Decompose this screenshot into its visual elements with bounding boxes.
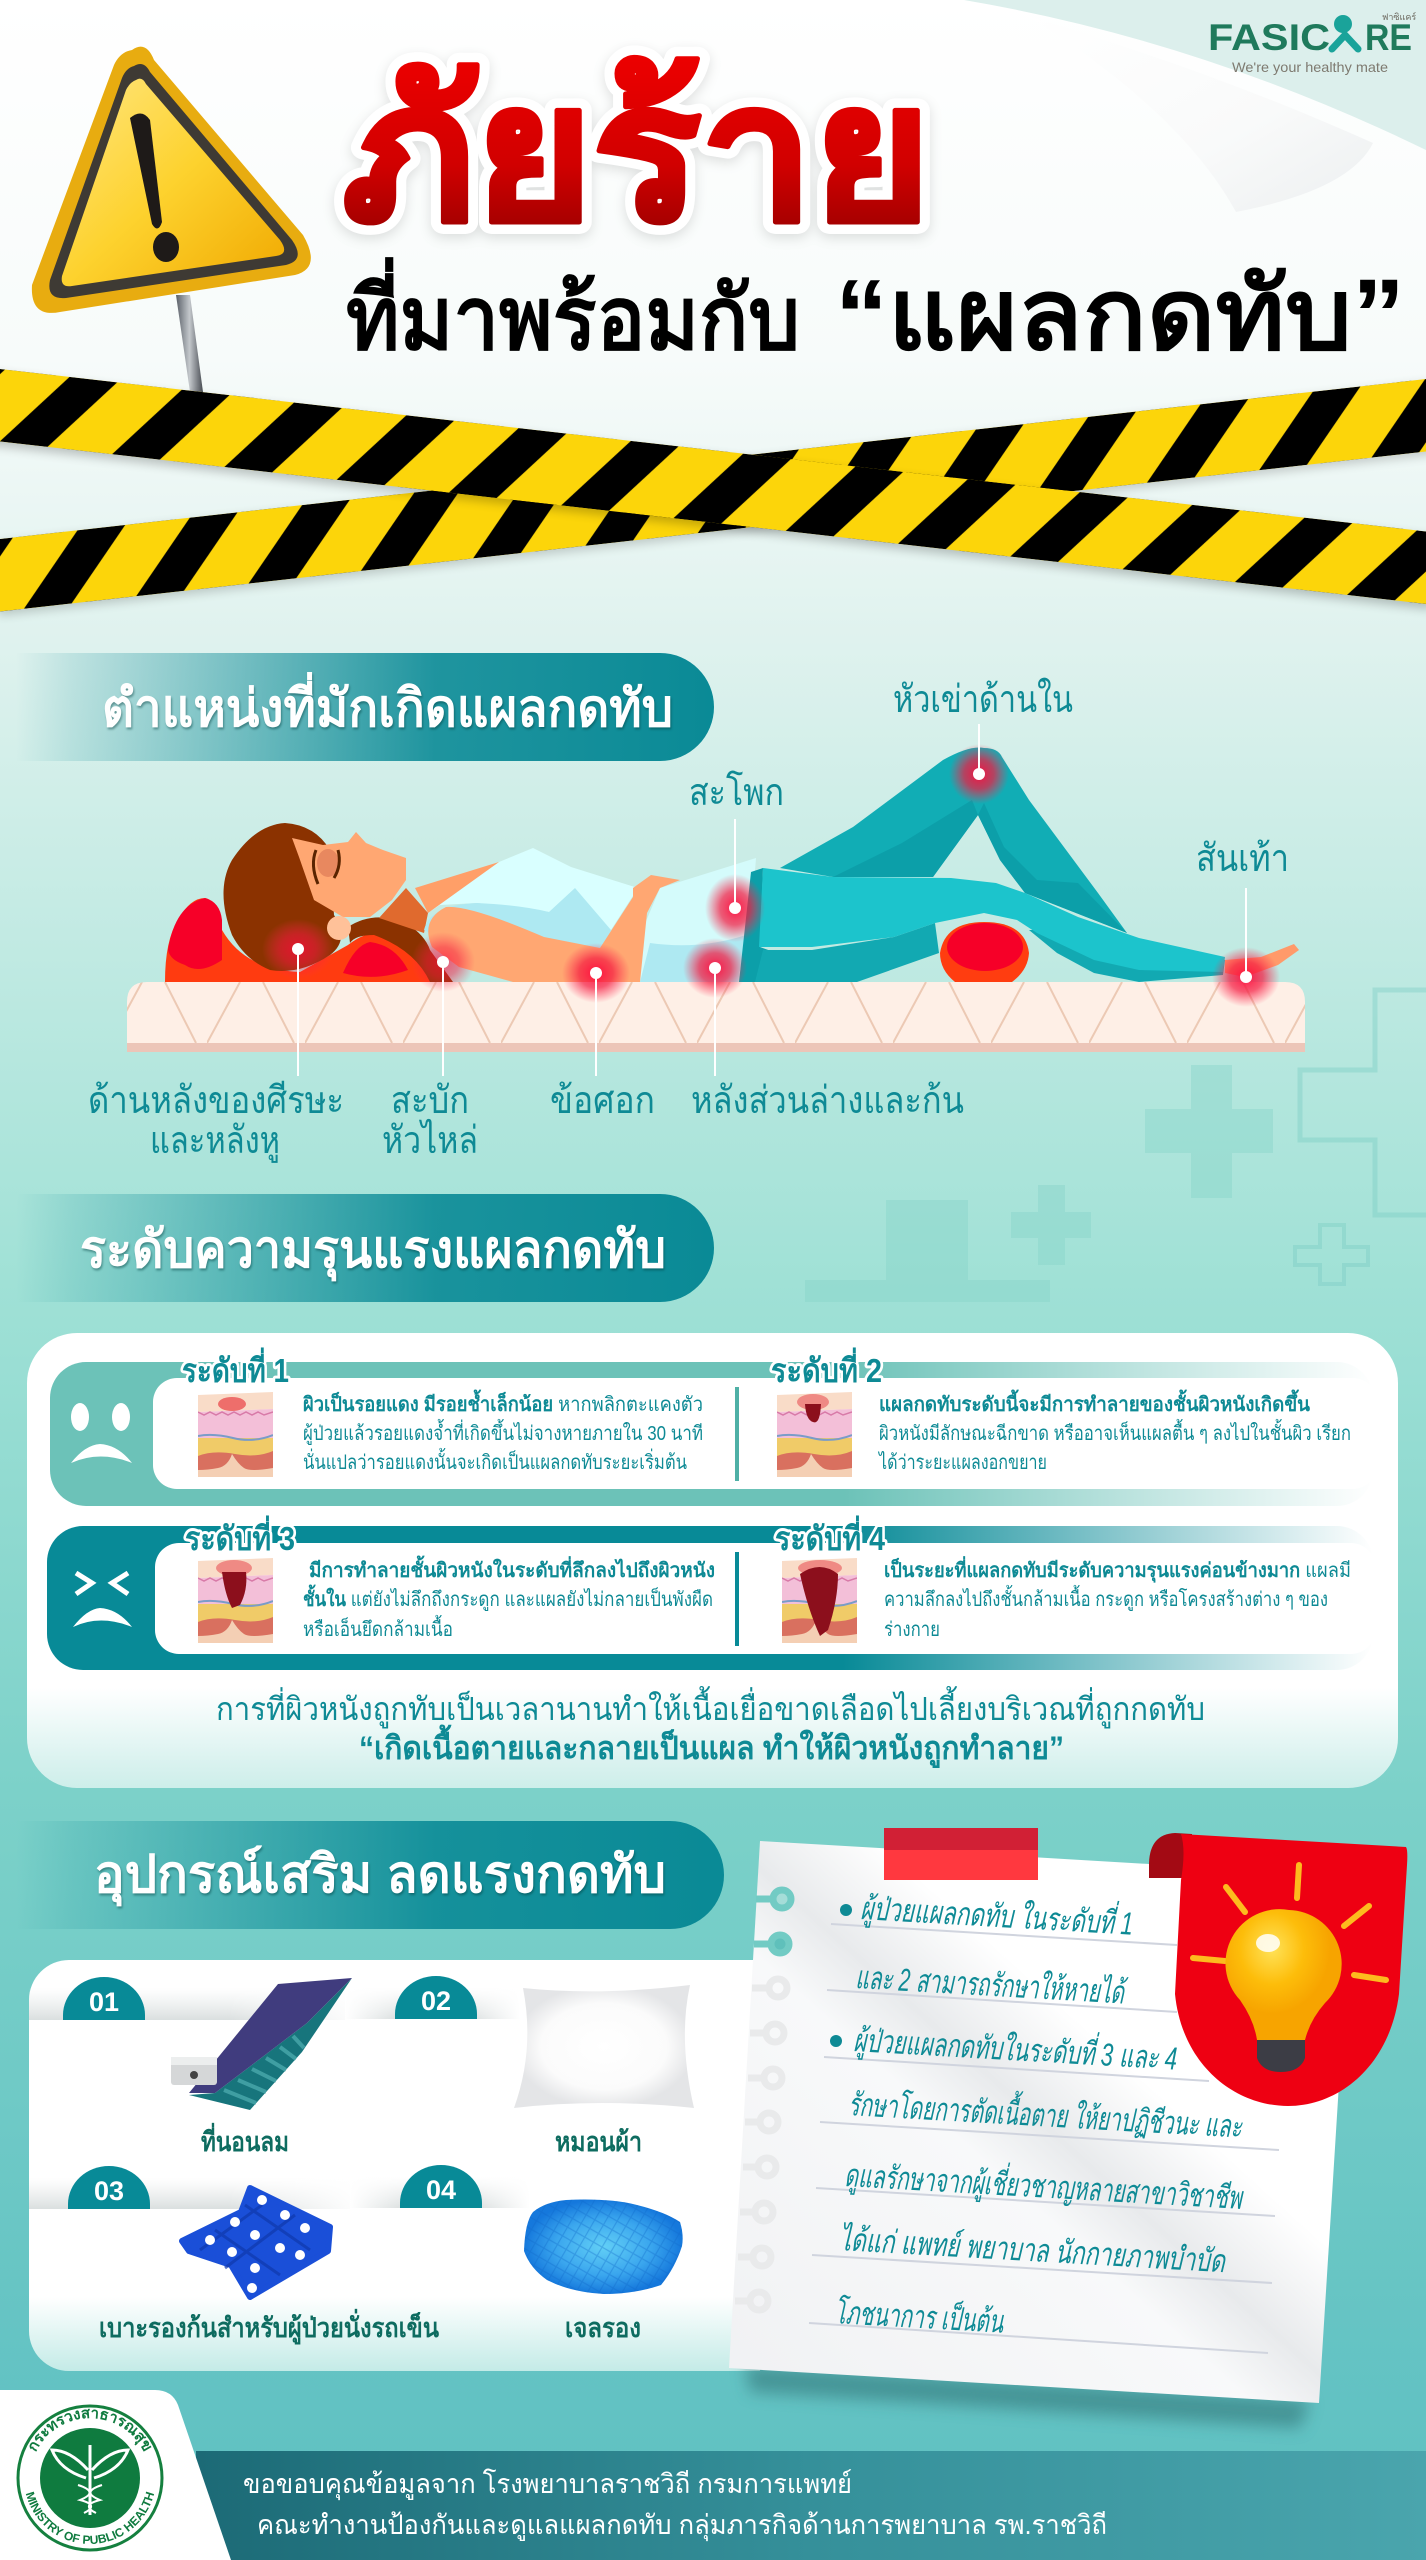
level 2 — [771, 1347, 1351, 1477]
caption: air mattress: ที่นอนลม — [201, 2122, 289, 2157]
level 1: ผิวเป็นรอยแดง มีรอยช้ำเล็กน้อย หากพลิกตะแคงตัว — [303, 1389, 703, 1416]
shadow bands — [29, 1988, 530, 2210]
FASICARE logo: We're your healthy mate — [1232, 59, 1388, 75]
foot — [1225, 944, 1299, 977]
panel: accessories — [29, 1960, 760, 2371]
level 4: ร่างกาย — [884, 1619, 940, 1641]
statement text: การที่ผิวหนังถูกทับเป็นเวลานานทำให้เนื้อเยื่อขาดเลือดไปเลี้ยงบริเวณที่ถูกกดทับ — [216, 1686, 1205, 1729]
handwritten note text: และ 2 สามารถรักษาให้หายได้ — [855, 1959, 1129, 2011]
hazard tape: rising — [0, 377, 1426, 616]
ruled lines — [809, 1924, 1279, 2353]
level 2: แผลกดทับระดับนี้จะมีการทำลายของชั้นผิวหนังเกิดขึ้น — [879, 1389, 1310, 1416]
subtitle: “แผลกดทับ” — [835, 259, 1405, 371]
heading: accessories — [16, 1821, 724, 1929]
caption: cloth pillow: หมอนผ้า — [555, 2127, 642, 2157]
badge 03: 03 — [94, 2176, 124, 2206]
FASICARE logo: RE — [1365, 17, 1412, 58]
subtitle — [346, 257, 1405, 371]
level 4 — [775, 1515, 1351, 1643]
level 1 — [182, 1347, 703, 1477]
leg raised — [780, 748, 1127, 933]
body illustration — [127, 724, 1305, 1076]
back hair bun — [348, 917, 453, 982]
ministry seal: กระทรวงสาธารณสุข — [30, 2408, 152, 2452]
level 1: ระดับที่ 1 — [182, 1347, 289, 1389]
red tape — [884, 1828, 1038, 1880]
row band: levels 1 and 2 — [50, 1362, 1377, 1506]
footer band — [196, 2451, 1426, 2560]
pillow image — [514, 1985, 694, 2108]
level 3: หรือเอ็นยึดกล้ามเนื้อ — [303, 1615, 453, 1641]
label: shoulder blade: สะบัก — [391, 1080, 469, 1122]
caption: gel cushion: เจลรอง — [565, 2313, 641, 2343]
heading: severity levels: ระดับความรุนแรงแผลกดทับ — [80, 1221, 666, 1282]
statement text — [216, 1686, 1205, 1769]
handwritten note text: ผู้ป่วยแผลกดทับ ในระดับที่ 1 — [859, 1886, 1134, 1944]
badge 02 — [395, 1976, 477, 2019]
arm — [428, 875, 680, 982]
marker lines and dots — [292, 724, 1252, 1076]
handwritten note text: ผู้ป่วยแผลกดทับในระดับที่ 3 และ 4 — [852, 2018, 1178, 2079]
level 4: ระดับที่ 4 — [775, 1515, 886, 1557]
label: inner knee: หัวเข่าด้านใน — [893, 678, 1073, 721]
label: elbow: ข้อศอก — [550, 1080, 655, 1122]
level 2: ได้ว่าระยะแผลงอกขยาย — [877, 1451, 1047, 1474]
heading: severity levels — [16, 1194, 714, 1302]
bookmark with light bulb icon — [1149, 1833, 1407, 2106]
logo corner — [0, 2390, 231, 2560]
caption: wheelchair cushion: เบาะรองก้นสำหรับผู้ป่วยนั่งรถเข็น — [99, 2308, 439, 2345]
FASICARE logo: ฟาซิแคร์ — [1382, 11, 1416, 22]
badge 04 — [400, 2165, 482, 2208]
badge 02: 02 — [421, 1986, 451, 2016]
subtitle: ที่มาพร้อมกับ — [346, 257, 800, 368]
footer band: คณะทำงานป้องกันและดูแลแผลกดทับ กลุ่มภารกิจด้านการพยาบาล รพ.ราชวิถี — [257, 2510, 1107, 2542]
handwritten note text: ได้แก่ แพทย์ พยาบาล นักกายภาพบำบัด — [839, 2221, 1228, 2279]
level 3 — [185, 1515, 715, 1643]
shirt — [424, 848, 756, 982]
label: lower back and buttocks: หลังส่วนล่างและก้น — [691, 1080, 964, 1122]
warning sign — [32, 47, 311, 392]
row band: levels 3 and 4 — [47, 1526, 1375, 1670]
ear — [327, 916, 351, 940]
level 4: เป็นระยะที่แผลกดทับมีระดับความรุนแรงค่อนข้างมาก แผลมี — [884, 1555, 1351, 1583]
ministry seal: MINISTRY OF PUBLIC HEALTH — [26, 2492, 154, 2544]
FASICARE logo: FASIC — [1208, 17, 1330, 58]
badge 01: 01 — [89, 1987, 119, 2017]
label: back of head and ears: ด้านหลังของศีรษะ — [88, 1080, 344, 1122]
label: shoulder blade — [382, 1080, 478, 1162]
level 3: ชั้นใน แต่ยังไม่ลึกถึงกระดูก และแผลยังไม่กลายเป็นพังผืด — [303, 1584, 713, 1612]
background crosses — [805, 990, 1426, 1302]
badge 04: 04 — [426, 2175, 456, 2205]
label: back of head and ears: และหลังหู — [150, 1120, 280, 1163]
heading: pressure sore locations — [16, 653, 714, 761]
level 1: นั่นแปลว่ารอยแดงนั้นจะเกิดเป็นแผลกดทับระยะเริ่มต้น — [303, 1448, 687, 1474]
label: heel: สันเท้า — [1196, 838, 1289, 880]
note shadow — [745, 2365, 1310, 2428]
title: ภัยร้าย — [343, 48, 931, 260]
dividers — [735, 1387, 739, 1646]
hazard tape: falling — [0, 368, 1426, 610]
ministry seal — [16, 2404, 164, 2552]
level 3: มีการทำลายชั้นผิวหนังในระดับที่ลึกลงไปถึงผิวหนัง — [309, 1555, 715, 1582]
level 1: ผู้ป่วยแล้วรอยแดงจ้ำที่เกิดขึ้นไม่จางหายภายใน 30 นาที — [303, 1419, 703, 1446]
gel cushion image — [524, 2200, 683, 2294]
seat cushion image — [182, 2188, 330, 2297]
pressure points — [262, 744, 1280, 1007]
label: hip: สะโพก — [689, 770, 784, 814]
page peel corner — [964, 0, 1426, 212]
footer band: ขอขอบคุณข้อมูลจาก โรงพยาบาลราชวิถี กรมการแพทย์ — [243, 2468, 852, 2501]
leg front — [739, 868, 1225, 982]
level 4: ความลึกลงไปถึงชั้นกล้ามเนื้อ กระดูก หรือโครงสร้างต่าง ๆ ของ — [884, 1585, 1328, 1612]
face — [292, 832, 406, 917]
heading: pressure sore locations: ตำแหน่งที่มักเกิดแผลกดทับ — [102, 672, 673, 738]
roller — [940, 922, 1029, 982]
heading: accessories: อุปกรณ์เสริม ลดแรงกดทับ — [94, 1845, 666, 1907]
FASICARE logo — [1208, 11, 1416, 75]
level 3: ระดับที่ 3 — [185, 1515, 295, 1557]
label: back of head and ears — [88, 1080, 344, 1163]
badge 03 — [68, 2166, 150, 2209]
bullets — [830, 1904, 852, 2047]
closed eye — [313, 849, 339, 884]
note paper — [729, 1828, 1352, 2428]
panel: severity levels — [27, 1333, 1398, 1788]
pillow — [165, 898, 432, 982]
mattress — [127, 982, 1305, 1052]
hair — [224, 823, 341, 971]
level 2: ระดับที่ 2 — [771, 1347, 882, 1389]
title: ภัยร้าย — [343, 48, 931, 260]
statement text: “เกิดเนื้อตายและกลายเป็นแผล ทำให้ผิวหนังถูกทำลาย” — [359, 1724, 1064, 1769]
chest and neck — [379, 862, 499, 933]
handwritten note text: โภชนาการ เป็นต้น — [834, 2293, 1005, 2340]
binder rings — [735, 1890, 791, 2310]
badge 01 — [63, 1977, 145, 2020]
handwritten note text — [834, 1886, 1245, 2340]
label: shoulder blade: หัวไหล่ — [382, 1119, 478, 1162]
air mattress image — [171, 1978, 352, 2110]
